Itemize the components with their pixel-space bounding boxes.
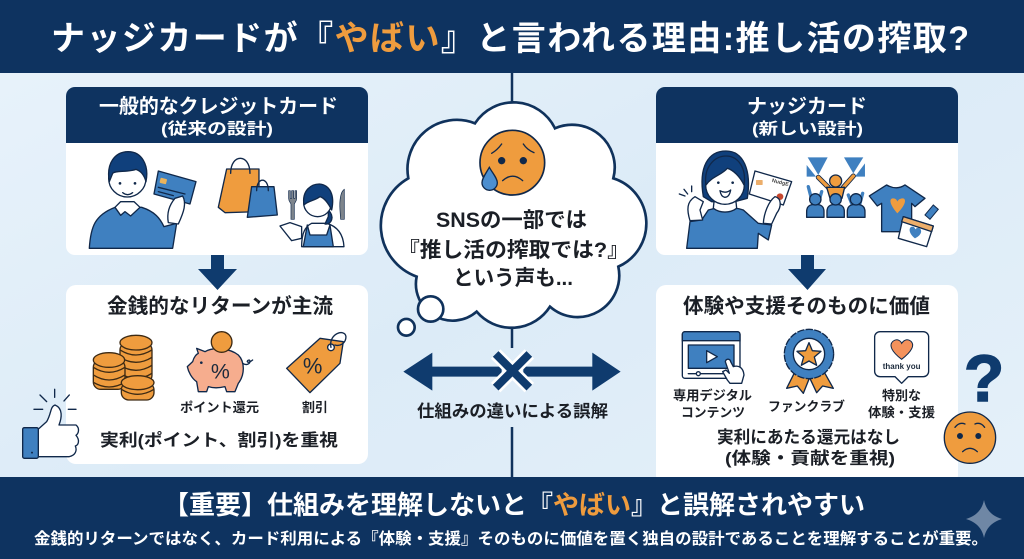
- icon: digital content: [682, 332, 744, 383]
- panel: experience value: [656, 285, 958, 485]
- icon: thank you message: thank you: [883, 362, 921, 371]
- caption: experience emphasis: (体験・貢献を重視): [725, 448, 895, 468]
- icon: waitress with cutlery: [280, 184, 344, 247]
- icon: concert crowd: [807, 157, 865, 217]
- bubble text: 『推し活の搾取では?』: [398, 239, 629, 262]
- arrows with cross: misunderstanding: [403, 353, 621, 391]
- title text: ナッジカードが『やばい』と言われる理由:推し活の搾取?: [51, 19, 969, 58]
- arrow: right panel down: [788, 255, 826, 290]
- banner body: 金銭的リターンではなく、カード利用による『体験・支援』そのものに価値を置く独自の設計であることを理解することが重要。: [34, 529, 988, 548]
- icon: sad face with tear: [480, 130, 545, 195]
- heading: monetary returns: 金銭的なリターンが主流: [107, 294, 333, 318]
- bubble text: [398, 209, 629, 290]
- label: dedicated digital content: コンテンツ: [681, 405, 745, 420]
- bubble text: という声も...: [453, 267, 573, 290]
- icon: woman with card: [679, 151, 792, 248]
- icon: worried face: [944, 412, 996, 463]
- heading: experience value: 体験や支援そのものに価値: [683, 295, 930, 318]
- icon: coin stacks: [93, 335, 154, 400]
- label: special experience and support: 特別な: [882, 388, 921, 403]
- icon: shopping bags: [218, 158, 277, 217]
- icon: man with card: [89, 152, 196, 248]
- arrow: left panel down: [198, 255, 237, 290]
- subheading: conventional design: (従来の設計): [161, 120, 273, 138]
- panel: nudge card: [656, 87, 958, 255]
- thought bubble: [381, 102, 646, 336]
- bubble trail large: [418, 296, 443, 322]
- label: dedicated digital content: [673, 388, 752, 420]
- label: dedicated digital content: 専用デジタル: [673, 388, 752, 403]
- caption: misunderstanding from mechanism difference: 仕組みの違いによる誤解: [417, 401, 608, 421]
- icon: thank you message: [875, 332, 929, 383]
- label: discount: 割引: [302, 400, 328, 415]
- icon: piggy bank: %: [211, 359, 230, 383]
- caption: real benefits: 実利(ポイント、割引)を重視: [100, 430, 338, 450]
- label: fan club: ファンクラブ: [768, 399, 845, 414]
- subheading: new design: (新しい設計): [752, 120, 863, 138]
- caption: no real rebate: 実利にあたる還元はなし: [717, 428, 900, 447]
- panel header: [656, 87, 958, 143]
- panel header: [66, 87, 368, 143]
- bubble trail small: [398, 319, 415, 336]
- icon: discount tag: [287, 333, 346, 393]
- icon: discount tag: %: [303, 353, 322, 378]
- label: special experience and support: [868, 388, 935, 420]
- icon: thumbs up: [23, 389, 79, 458]
- label: special experience and support: 体験・支援: [868, 405, 935, 420]
- icon: sparkle: [966, 500, 1002, 538]
- banner headline: 【重要】仕組みを理解しないと『やばい』と誤解されやすい: [163, 490, 865, 520]
- panel: monetary returns: [66, 285, 368, 464]
- icon: piggy bank: [187, 332, 253, 392]
- icon: woman with card: NudgE: [771, 178, 790, 188]
- label: point rebate: ポイント還元: [180, 400, 259, 415]
- bubble text: SNSの一部では: [436, 209, 587, 232]
- icon: question mark: ?: [964, 341, 1004, 415]
- heading: general credit card: 一般的なクレジットカード: [99, 95, 338, 118]
- bottom banner: [0, 477, 1024, 559]
- title banner: [0, 0, 1024, 73]
- panel: general credit card: [66, 87, 368, 255]
- icon: t-shirt and pouch: [869, 185, 938, 247]
- icon: fan club rosette: [784, 329, 834, 393]
- heading: nudge card: ナッジカード: [747, 96, 867, 118]
